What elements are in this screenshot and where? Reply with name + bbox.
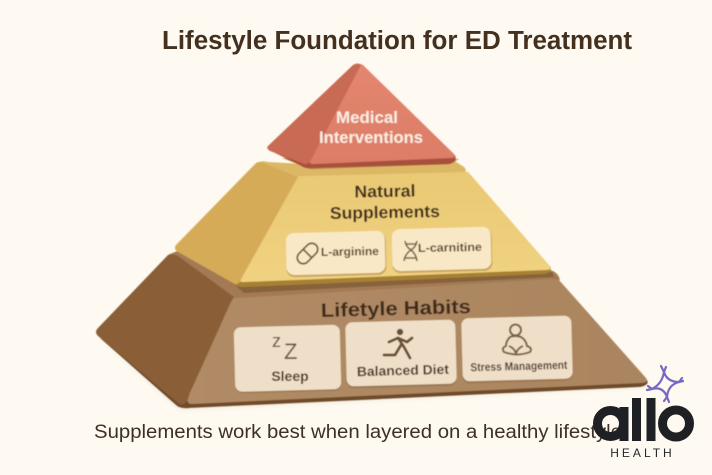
tier front face <box>310 64 455 164</box>
tier ledge shadow <box>236 272 554 293</box>
card: sleep: Z <box>284 339 297 364</box>
card: l-carnitine: L-carnitine <box>418 240 482 255</box>
tier left face <box>267 64 361 164</box>
pyramid tier: medical interventions <box>267 64 456 168</box>
tier front face <box>188 277 647 404</box>
card: stress management: Stress Management <box>470 360 568 374</box>
card: stress management <box>461 316 573 383</box>
logo: allo health <box>598 366 690 460</box>
tier left face <box>96 254 234 404</box>
tier left face <box>175 162 298 284</box>
icon: capsule <box>295 241 320 266</box>
tier ledge shadow <box>282 158 459 169</box>
tier base front edge <box>100 338 648 408</box>
heading: lifestyle habits: Lifetyle Habits <box>321 296 471 322</box>
tier top ledge <box>168 250 560 298</box>
card: l-arginine: L-arginine <box>321 244 379 259</box>
icon: star <box>647 366 683 402</box>
heading: natural supplements: Natural <box>354 181 416 202</box>
title: Lifestyle Foundation for ED Treatment <box>162 27 633 55</box>
heading: medical interventions: Medical <box>336 109 398 127</box>
icon: sleep z: z <box>272 331 281 351</box>
pyramid tier: natural supplements <box>175 158 551 287</box>
heading: natural supplements: Supplements <box>330 202 440 223</box>
logo: allo health: HEALTH <box>610 446 675 460</box>
icon: runner <box>384 329 412 358</box>
heading: natural supplements <box>330 181 440 223</box>
tier bottom edge <box>269 150 456 168</box>
icon: dna <box>404 241 417 261</box>
card: balanced diet <box>345 320 457 388</box>
tier front face <box>240 171 550 282</box>
tier bottom edge <box>177 250 551 287</box>
card: sleep <box>234 325 341 393</box>
card: l-arginine <box>285 231 387 277</box>
card: l-carnitine <box>391 227 493 273</box>
wordmark <box>598 398 690 441</box>
pyramid tier: lifestyle habits <box>96 250 648 409</box>
tier top ledge <box>256 158 466 178</box>
card: balanced diet: Balanced Diet <box>357 362 450 379</box>
icon: meditation <box>503 324 531 354</box>
heading: medical interventions: Interventions <box>319 129 423 147</box>
heading: medical interventions <box>319 109 423 147</box>
caption: Supplements work best when layered on a healthy lifestyle <box>94 422 622 443</box>
card: sleep: Sleep <box>271 368 309 384</box>
